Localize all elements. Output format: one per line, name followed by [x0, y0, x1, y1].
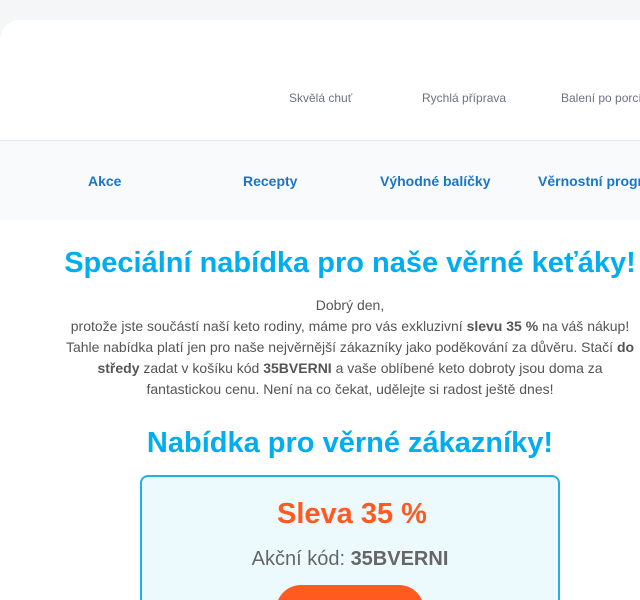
intro text: protože jste součástí naší keto rodiny, máme pro vás exkluzivní slevu 35 % na váš nákup! — [71, 318, 629, 334]
benefit: great taste: Skvělá chuť — [289, 91, 352, 105]
navigation bar — [0, 140, 640, 220]
intro text — [66, 297, 634, 397]
nav link: Výhodné balíčky: Výhodné balíčky — [380, 173, 490, 189]
nav link: Akce: Akce — [88, 173, 121, 189]
benefit: quick preparation: Rychlá příprava — [422, 91, 506, 105]
intro text: Dobrý den, — [316, 297, 384, 313]
intro text: Tahle nabídka platí jen pro naše nejvěrnější zákazníky jako poděkování za důvěru. Stačí do — [66, 339, 634, 355]
discount title: Sleva 35 % — [277, 498, 427, 530]
navigation links — [88, 173, 640, 189]
offer heading: Nabídka pro věrné zákazníky! — [147, 427, 553, 459]
intro text: fantastickou cenu. Není na co čekat, udělejte si radost ještě dnes! — [146, 381, 554, 397]
nav link: Recepty: Recepty — [243, 173, 297, 189]
intro text: středy zadat v košíku kód 35BVERNI a vaše oblíbené keto dobroty jsou doma za — [97, 360, 603, 376]
benefits row — [289, 91, 640, 105]
main heading: Speciální nabídka pro naše věrné keťáky! — [64, 247, 636, 279]
promo code: Akční kód: 35BVERNI — [252, 548, 448, 570]
panel: offer box — [140, 475, 560, 600]
